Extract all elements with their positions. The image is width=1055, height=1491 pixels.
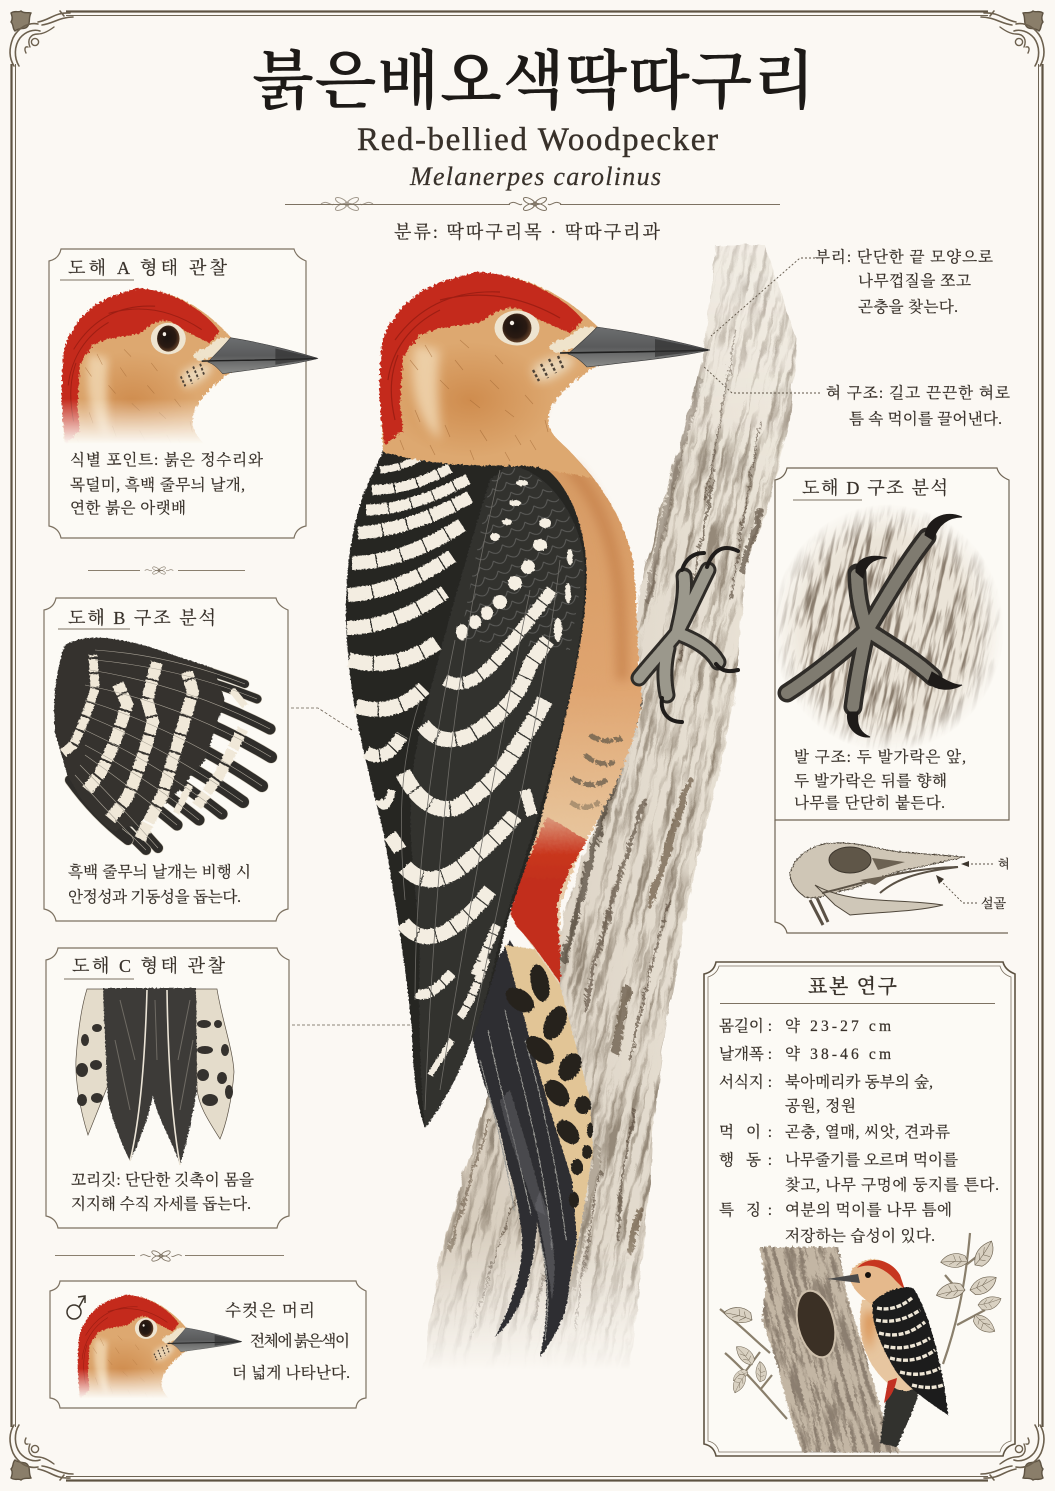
- callout: tongue: 혀 구조: 길고 끈끈한 혀로: [826, 383, 1010, 402]
- specimen facts: 약 38-46 cm: [785, 1044, 891, 1063]
- specimen facts: 나무줄기를 오르며 먹이를: [785, 1150, 958, 1169]
- callout: bill: 나무껍질을 쪼고: [858, 271, 971, 290]
- classification: 분류: 딱따구리목 · 딱따구리과: [394, 221, 661, 242]
- panel B note: 흑백 줄무늬 날개는 비행 시: [68, 862, 251, 881]
- callout: bill: [815, 247, 993, 316]
- branches and leaves: [720, 1233, 1001, 1419]
- panel C note: 꼬리깃: 단단한 깃촉이 몸을: [71, 1170, 254, 1189]
- wing spots: [456, 480, 573, 642]
- panel C heading: 도해 C 형태 관찰: [72, 955, 226, 976]
- panel B note: 안정성과 기동성을 돕는다.: [68, 887, 241, 906]
- panel D note: 두 발가락은 뒤를 향해: [794, 771, 947, 790]
- panel B: wing: [44, 598, 288, 921]
- panel C note: 지지해 수직 자세를 돕는다.: [71, 1194, 251, 1213]
- hole: [790, 1287, 842, 1361]
- specimen facts: 행 동 :: [719, 1150, 772, 1169]
- divider left 2: [55, 1250, 284, 1262]
- label: tongue arrow: 혀: [998, 856, 1010, 871]
- male note text: 더 넓게 나타난다.: [232, 1363, 350, 1382]
- callout: bill: 부리: 단단한 끝 모양으로: [815, 247, 993, 266]
- leader: tongue: [703, 366, 820, 393]
- label: tongue arrow: [961, 856, 1010, 871]
- trunk: [760, 1246, 900, 1454]
- panel A note: [70, 450, 263, 517]
- callout: tongue: 틈 속 먹이를 끌어낸다.: [849, 409, 1002, 428]
- specimen facts: 몸길이 :: [719, 1016, 772, 1035]
- small bird: [827, 1259, 948, 1447]
- specimen facts: 곤충, 열매, 씨앗, 견과류: [785, 1122, 950, 1141]
- title divider: [285, 196, 780, 212]
- main bird: [346, 273, 710, 1357]
- specimen facts: 서식지 :: [719, 1072, 772, 1091]
- panel C note: [71, 1170, 254, 1213]
- breast and belly: [510, 438, 642, 985]
- male note text: 수컷은 머리: [225, 1300, 315, 1320]
- label: hyoid arrow: [936, 875, 1006, 911]
- foot main: [639, 548, 738, 722]
- panel D note: 나무를 단단히 붙든다.: [794, 793, 945, 812]
- callout: bill: 곤충을 찾는다.: [858, 297, 958, 316]
- tree trunk: [426, 244, 797, 1362]
- tail illustration: [76, 988, 234, 1165]
- breast shading: [570, 468, 622, 680]
- shoulder scallops: [460, 467, 583, 650]
- specimen facts: 북아메리카 동부의 숲,: [785, 1072, 933, 1091]
- panel D note: [794, 747, 966, 812]
- leader: tail: [292, 1024, 412, 1026]
- panel A heading: 도해 A 형태 관찰: [68, 257, 228, 278]
- male head illustration: [77, 1294, 242, 1398]
- title: [252, 46, 815, 191]
- body black: [346, 447, 587, 1128]
- male note text: [225, 1300, 350, 1382]
- specimen facts: 날개폭 :: [719, 1044, 772, 1063]
- panel A: head: [49, 249, 318, 538]
- foot illustration: [774, 506, 1000, 750]
- tail: [470, 940, 590, 1357]
- panel: specimen study: [694, 962, 1015, 1490]
- panel A note: 연한 붉은 아랫배: [70, 498, 186, 517]
- skull illustration: [790, 843, 965, 925]
- belly bars: [570, 735, 622, 807]
- panel: male note: [50, 1281, 366, 1418]
- panel A note: 식별 포인트: 붉은 정수리와: [70, 450, 263, 469]
- wing overlay: [411, 465, 585, 1128]
- leader: wing: [291, 708, 352, 730]
- head: [379, 273, 710, 478]
- panel B note: [68, 862, 251, 906]
- male note text: 전체에 붉은색이: [250, 1331, 350, 1350]
- panel C: tail: [46, 948, 289, 1228]
- wing illustration: [54, 638, 271, 850]
- specimen facts: 공원, 정원: [785, 1096, 856, 1115]
- panel D: foot: [774, 467, 1010, 821]
- rump bars: [501, 945, 593, 1285]
- tree hole scene: [719, 1232, 1002, 1454]
- divider left 1: [88, 566, 245, 575]
- panel: skull: [775, 820, 1010, 933]
- specimen heading: 표본 연구: [808, 975, 897, 998]
- red vent patch: [510, 817, 587, 983]
- specimen facts: 약 23-27 cm: [785, 1016, 891, 1035]
- title: 붉은배오색딱따구리: [252, 46, 815, 117]
- back white bars: [347, 452, 470, 806]
- wing white bars: [390, 590, 552, 1075]
- specimen facts: [719, 1016, 999, 1245]
- panel A head illustration: [60, 288, 318, 442]
- callout: tongue: [826, 383, 1010, 428]
- label: hyoid arrow: 설골: [981, 896, 1006, 911]
- title: Melanerpes carolinus: [409, 162, 661, 191]
- specimen facts: 여분의 먹이를 나무 틈에: [785, 1200, 952, 1219]
- title: Red-bellied Woodpecker: [357, 122, 718, 158]
- specimen facts: 특 징 :: [719, 1200, 772, 1219]
- specimen facts: 저장하는 습성이 있다.: [785, 1226, 935, 1245]
- panel D heading: 도해 D 구조 분석: [802, 478, 948, 498]
- specimen facts: 찾고, 나무 구멍에 둥지를 튼다.: [785, 1175, 999, 1194]
- leader: bill: [711, 258, 815, 336]
- wing feather shafts: [401, 470, 560, 1110]
- panel B heading: 도해 B 구조 분석: [68, 608, 216, 628]
- panel A note: 목덜미, 흑백 줄무늬 날개,: [70, 475, 245, 494]
- specimen facts: 먹 이 :: [719, 1122, 772, 1141]
- panel D note: 발 구조: 두 발가락은 앞,: [794, 747, 966, 766]
- icon: male symbol: [67, 1296, 85, 1319]
